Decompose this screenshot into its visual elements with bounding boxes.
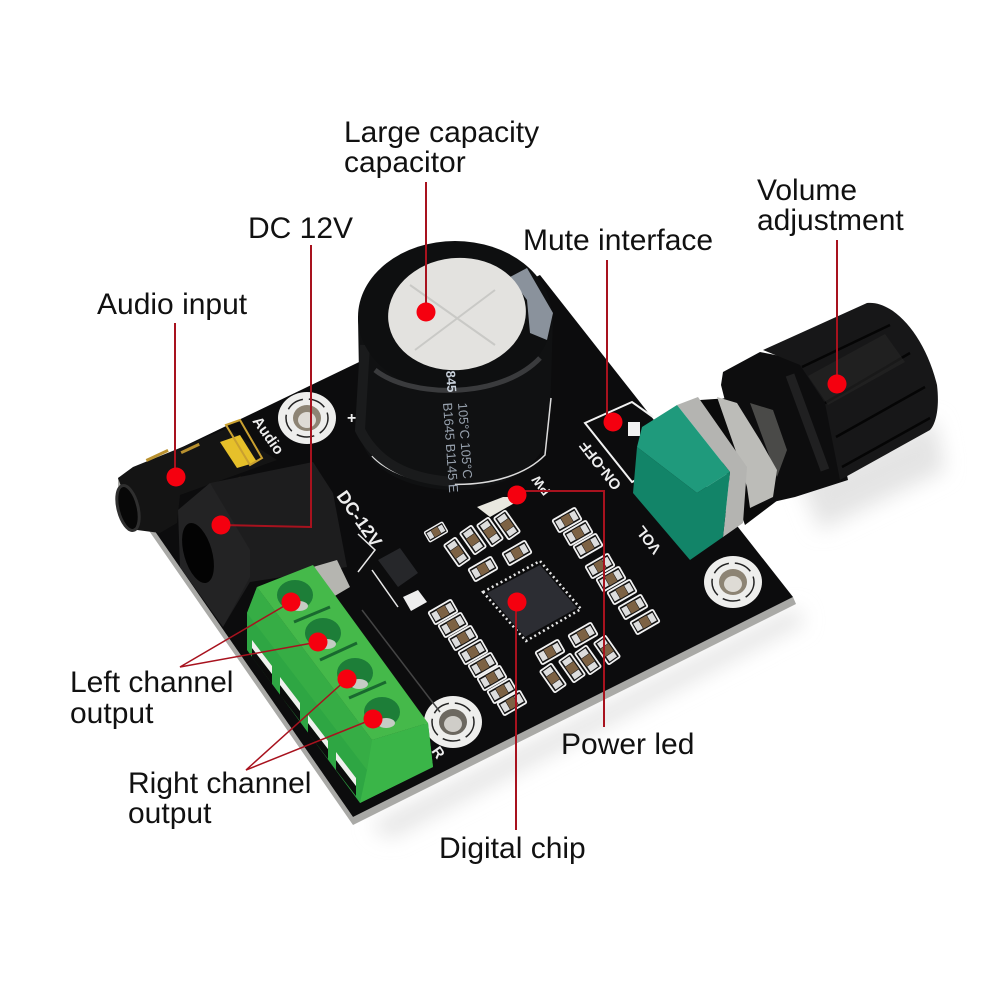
component group: top middle (424, 510, 532, 582)
metal housing (677, 397, 747, 537)
callout: right channel output: output (128, 797, 212, 830)
large capacitor: B1645 B1145 E (440, 402, 461, 493)
board silk labels: + (347, 410, 356, 427)
callout: left channel output (70, 592, 328, 730)
mounting hole: bottom (424, 696, 482, 748)
green output terminal (247, 560, 433, 803)
board silk labels: R (428, 744, 448, 762)
callout: right channel output: Right channel (128, 767, 311, 800)
callout: volume adjustment (757, 174, 904, 394)
callout: audio input (97, 288, 248, 486)
DC power jack (176, 462, 347, 627)
callout: large capacity capacitor: Large capacity (344, 116, 539, 149)
audio input jack (113, 420, 277, 533)
large capacitor: 845 (443, 370, 459, 393)
callout: digital chip (439, 592, 586, 865)
mute interface outline (585, 402, 653, 482)
board silk labels: PW (528, 472, 553, 498)
knob body (763, 303, 938, 480)
callout: mute interface (523, 224, 713, 432)
soft shadows (370, 420, 945, 838)
callout: digital chip: Digital chip (439, 832, 586, 865)
knob skirt (721, 352, 848, 505)
callout: volume adjustment: adjustment (757, 204, 904, 237)
board silk labels: Audio (249, 414, 287, 458)
large capacitor: 105°C 105°C (455, 402, 475, 479)
power led (477, 497, 525, 517)
circuit board (118, 275, 796, 825)
callout: mute interface: Mute interface (523, 224, 713, 257)
component group: left (428, 599, 527, 716)
callout: audio input: Audio input (97, 288, 248, 321)
callout: left channel output: Left channel (70, 666, 233, 699)
metal nut (717, 397, 777, 508)
callout: large capacity capacitor: capacitor (344, 146, 466, 179)
silk lines near terminal (358, 534, 440, 712)
callout: DC 12V (212, 212, 353, 534)
mounting hole: right (704, 556, 762, 608)
gold pins (146, 443, 241, 492)
callout: left channel output: output (70, 697, 154, 730)
gold contact (220, 420, 262, 468)
large capacitor (358, 241, 553, 493)
callout: large capacity capacitor (344, 116, 539, 322)
board silk labels: DC-12V (333, 487, 386, 551)
diode (378, 548, 427, 611)
callout: power led: Power led (561, 728, 694, 761)
board silk labels: ON-OFF (576, 437, 625, 493)
callout: volume adjustment: Volume (757, 174, 857, 207)
board silk labels (249, 410, 665, 762)
potentiometer and knob (633, 303, 938, 560)
component group: top right (552, 507, 660, 635)
threaded shaft (750, 403, 787, 477)
callout: power led (508, 486, 694, 761)
callout: DC 12V: DC 12V (248, 212, 353, 245)
mounting hole: top left (278, 392, 336, 444)
component group: bottom (535, 622, 620, 693)
callout: right channel output (128, 670, 382, 830)
digital chip (483, 561, 581, 641)
board silk labels: VOL (633, 522, 665, 557)
dark backing (700, 395, 790, 525)
green potentiometer (633, 405, 730, 560)
